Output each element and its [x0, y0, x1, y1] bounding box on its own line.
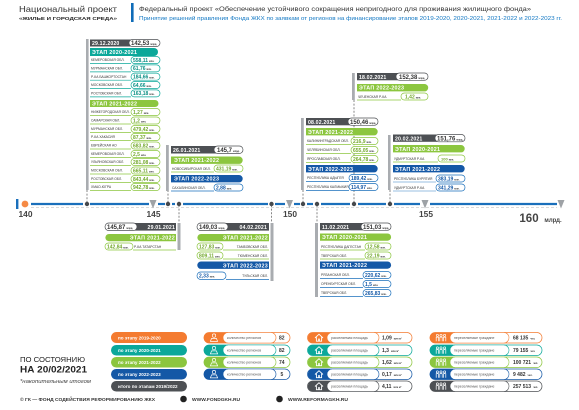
panel: 11.02.2021: ЭТАП 2021-2022 [322, 263, 367, 269]
stats: resettled citizens: переселяемые граждане [454, 372, 494, 376]
panel: 29.12.2020: 142,53 млрд. [131, 41, 157, 47]
stats: resettled area: расселяемая площадь [331, 384, 368, 388]
panel: 29.12.2020: Р-КА ХАКАСИЯ [91, 135, 116, 139]
panel: 04.02.2021: 809,11 млн. [199, 253, 221, 259]
panel: 04.02.2021: ТАМБОВСКАЯ ОБЛ. [237, 245, 268, 249]
stats: resettled area [308, 332, 412, 392]
panel: 11.02.2021: 22,19 млн. [367, 253, 386, 259]
panel: 29.12.2020: 163,18 млн. [133, 91, 155, 97]
panel: 08.02.2021: 655,05 млн. [353, 148, 375, 154]
panel: 20.02.2021: ЭТАП 2020-2021 [395, 147, 440, 153]
stats: number of regions: 82 [279, 336, 285, 342]
legend: stages [111, 332, 187, 392]
legend: stages: по этапу 2021-2022 [118, 360, 161, 365]
panel: 18.02.2021 [352, 73, 428, 100]
stats: resettled citizens: 68 135 чел. [513, 336, 536, 342]
panel: 29.12.2020: 61,76 млн. [133, 66, 152, 72]
footer: © ГК — ФОНД СОДЕЙСТВИЯ РЕФОРМИРОВАНИЮ ЖКХ [20, 397, 155, 402]
panel: 29.12.2020: 683,82 млн. [133, 143, 155, 149]
panel: 11.02.2021: 151,03 млрд. [363, 225, 389, 231]
panel: 29.12.2020: ЭТАП 2020-2021 [92, 50, 137, 56]
panel: 29.12.2020: 64,66 млн. [133, 83, 152, 89]
panel: 11.02.2021: 220,62 млн. [365, 273, 387, 279]
stats: resettled citizens: переселяемые граждане [454, 384, 494, 388]
panel: 29.12.2020: 281,08 млн. [133, 160, 155, 166]
stats: number of regions: 82 [279, 348, 285, 354]
panel: 29.12.2020: МОСКОВСКАЯ ОБЛ. [91, 169, 123, 173]
timeline axis: 160 [519, 213, 539, 225]
legend: stages: итого по этапам 2019/2022 [118, 384, 178, 389]
panel: 29.12.2020: 87,37 млн. [133, 135, 152, 141]
panel: 11.02.2021: РЯЗАНСКАЯ ОБЛ. [321, 273, 350, 277]
header: federal project [139, 5, 562, 22]
timeline axis: 155 [419, 209, 433, 219]
panel: 08.02.2021: ЧЕЛЯБИНСКАЯ ОБЛ. [307, 148, 341, 152]
legend: stages: по этапу 2019-2020 [118, 335, 161, 340]
footer [20, 396, 348, 402]
panel: 18.02.2021: 152,38 млрд. [399, 75, 425, 81]
stats: resettled area: 1,62 млн м² [382, 360, 402, 366]
panel: 08.02.2021: 08.02.2021 [308, 120, 335, 126]
legend: stages: по этапу 2022-2023 [118, 372, 161, 377]
panel: 29.12.2020: МОСКОВСКАЯ ОБЛ. [91, 83, 123, 87]
stats: resettled area: расселяемая площадь [331, 336, 368, 340]
panel: 29.12.2020 [86, 39, 160, 191]
stats: resettled area: расселяемая площадь [331, 372, 368, 376]
panel: 04.02.2021: ТЮМЕНСКАЯ ОБЛ. [238, 254, 268, 258]
panel: 20.02.2021 [388, 134, 465, 191]
panel: 20.02.2021: 20.02.2021 [395, 136, 422, 142]
timeline axis: 150 [283, 209, 297, 219]
panel: 08.02.2021: РЕСПУБЛИКА АДЫГЕЯ [307, 176, 344, 180]
stats: number of regions: количество регионов [227, 336, 261, 340]
panel: 29.12.2020: 184,66 млн. [133, 74, 155, 80]
panel: 26.01.2021: 431,19 млн. [216, 166, 238, 172]
stats: resettled citizens: переселяемые граждане [454, 336, 494, 340]
panel: 29.12.2020: ХМАО-ЮГРА [91, 185, 112, 189]
stats: resettled citizens [430, 332, 542, 392]
stats: resettled citizens: переселяемые граждане [454, 348, 494, 352]
panel: 29.12.2020: ЕВРЕЙСКАЯ АО [91, 144, 117, 148]
panel: 29.12.2020: УЛЬЯНОВСКАЯ ОБЛ. [91, 160, 124, 164]
panel: 04.02.2021: 2,33 млн. [199, 274, 215, 280]
panel: 20.02.2021: 341,29 млн. [438, 185, 460, 191]
stats: resettled citizens: 9 482 чел. [513, 372, 533, 378]
panel: 08.02.2021: 264,78 млн. [353, 157, 375, 163]
panel: 08.02.2021: 189,42 млн. [351, 176, 373, 182]
panel: 29.12.2020: САМАРСКАЯ ОБЛ. [91, 119, 120, 123]
panel: 26.01.2021: ЭТАП 2021-2022 [174, 158, 219, 164]
panel: 08.02.2021: ЯРОСЛАВСКАЯ ОБЛ. [307, 157, 340, 161]
panel: 04.02.2021: ЭТАП 2021-2022 [223, 236, 268, 242]
panel: 29.01.2021: ЭТАП 2021-2022 [130, 236, 175, 242]
panel: 18.02.2021: 1,42 млн. [405, 94, 421, 100]
stats: resettled citizens: 79 155 чел. [513, 348, 536, 354]
panel: 11.02.2021: ТВЕРСКАЯ ОБЛ. [321, 254, 347, 258]
panel: 29.12.2020: НИЖЕГОРОДСКАЯ ОБЛ. [91, 110, 130, 114]
panel: 11.02.2021: ТВЕРСКАЯ ОБЛ. [321, 291, 347, 295]
panel: 04.02.2021: 04.02.2021 [240, 225, 267, 231]
panel: 11.02.2021 [315, 223, 391, 297]
panel: 29.01.2021 [105, 223, 180, 250]
stats: resettled citizens: переселяемые граждане [454, 360, 494, 364]
panel: 20.02.2021: РЕСПУБЛИКА БУРЯТИЯ [394, 177, 433, 181]
panel: 26.01.2021: 2,88 млн. [216, 185, 232, 191]
panel: 29.12.2020: ЭТАП 2021-2022 [92, 102, 137, 108]
stats: resettled area: расселяемая площадь [331, 348, 368, 352]
panel: 26.01.2021: ЭТАП 2022-2023 [174, 177, 219, 183]
panel: 18.02.2021: ЧЕЧЕНСКАЯ Р-КА [358, 95, 387, 99]
panel: 29.12.2020: 558,11 млн. [133, 58, 155, 64]
panel: 11.02.2021: ОРЕНБУРГСКАЯ ОБЛ. [321, 282, 356, 286]
panel: 29.12.2020: 29.12.2020 [92, 41, 119, 47]
panel: 20.02.2021: ЭТАП 2021-2022 [395, 167, 440, 173]
status date heading: *накопительным итогом [20, 379, 92, 385]
stats: resettled area: 0,17 млн м² [382, 372, 402, 378]
stats: number of regions: 74 [279, 360, 285, 366]
panel: 04.02.2021: 149,03 млрд. [199, 225, 225, 231]
panel: 20.02.2021: УДМУРТСКАЯ Р-КА [394, 157, 425, 161]
stats: resettled citizens: 100 721 чел. [513, 360, 538, 366]
panel: 11.02.2021: ЭТАП 2020-2021 [322, 235, 367, 241]
panel: 26.01.2021: 145,7 млрд. [217, 148, 240, 154]
stats: resettled area: 4,11 млн м² [382, 384, 402, 390]
header: federal project: Принятие решений правления Фонда ЖКХ по заявкам от регионов на финансирование этапов 2019-2020, 2020-2021, 2021-2022 и 2022-2023 гг. [139, 15, 562, 22]
connector dashes [87, 100, 390, 223]
header accent bar [131, 3, 134, 22]
header: national project: «ЖИЛЬЕ И ГОРОДСКАЯ СРЕДА» [19, 16, 117, 21]
stats: number of regions: 5 [280, 372, 284, 378]
panel: 18.02.2021: ЭТАП 2022-2023 [359, 86, 404, 92]
panel: 29.12.2020: РОСТОВСКАЯ ОБЛ. [91, 92, 122, 96]
panel: 29.12.2020: Р-КА БАШКОРТОСТАН [91, 75, 127, 79]
legend: stages: по этапу 2020-2021 [118, 348, 161, 353]
panel: 08.02.2021: 150,46 млрд. [350, 120, 376, 126]
panel: 29.12.2020: МУРМАНСКАЯ ОБЛ. [91, 67, 123, 71]
panel: 26.01.2021: САХАЛИНСКАЯ ОБЛ. [172, 186, 206, 190]
panel: 26.01.2021: 26.01.2021 [173, 148, 200, 154]
panel: 08.02.2021: ЭТАП 2021-2022 [308, 130, 353, 136]
panel: 20.02.2021: 383,19 млн. [438, 176, 460, 182]
panel: 11.02.2021: 11.02.2021 [322, 225, 349, 231]
stats: resettled area: расселяемая площадь [331, 360, 368, 364]
panel: 20.02.2021: 151,76 млрд. [437, 136, 463, 142]
panel: 29.01.2021: Р-КА ТАТАРСТАН [134, 245, 162, 249]
stats: resettled citizens: 257 513 чел. [513, 384, 538, 390]
panel: 26.01.2021 [166, 145, 243, 191]
panel: 08.02.2021 [301, 118, 378, 191]
panel: 18.02.2021: 18.02.2021 [359, 75, 386, 81]
panel: 29.12.2020: МУРМАНСКАЯ ОБЛ. [91, 127, 123, 131]
stats: number of regions: количество регионов [227, 348, 261, 352]
header: federal project: Федеральный проект «Обеспечение устойчивого сокращения непригодного для проживания жилищного фонда» [139, 5, 531, 13]
panel: 04.02.2021 [197, 223, 274, 281]
panel: 08.02.2021: ЭТАП 2022-2023 [308, 167, 353, 173]
panel: 29.12.2020: 479,42 млн. [133, 127, 155, 133]
panel: 29.12.2020: 665,11 млн. [133, 168, 155, 174]
panel: 04.02.2021: ТУЛЬСКАЯ ОБЛ. [242, 274, 268, 278]
panel: 29.12.2020: 942,78 млн. [133, 185, 155, 191]
panel: 29.12.2020: РОСТОВСКАЯ ОБЛ. [91, 177, 122, 181]
panel: 26.01.2021: НОВОСИБИРСКАЯ ОБЛ. [172, 167, 211, 171]
status date heading: ПО СОСТОЯНИЮ [20, 355, 85, 364]
timeline axis: 145 [147, 209, 161, 219]
panel: 08.02.2021: 216,9 млн. [353, 139, 372, 145]
panel: 29.12.2020: 1,27 млн. [133, 110, 149, 116]
panel: 11.02.2021: 265,83 млн. [365, 291, 387, 297]
panel: 11.02.2021: 12,58 млн. [367, 244, 386, 250]
stats: number of regions [204, 332, 290, 380]
panel: 11.02.2021: 1,5 млн. [365, 282, 378, 288]
panel: 08.02.2021: РЕСПУБЛИКА КАЛМЫКИЯ [307, 185, 349, 189]
header: national project [19, 4, 117, 21]
panel: 29.12.2020: 2,5 млн. [133, 152, 146, 158]
panel: 04.02.2021: ЭТАП 2022-2023 [223, 263, 268, 269]
panel: 29.01.2021: 29.01.2021 [148, 225, 175, 231]
start marker [22, 201, 28, 207]
panel: 11.02.2021: РЕСПУБЛИКА ДАГЕСТАН [321, 245, 362, 249]
panel: 29.12.2020: 1,2 млн. [133, 118, 146, 124]
timeline axis: млрд. [544, 218, 562, 224]
stats: number of regions: количество регионов [227, 372, 261, 376]
panel: 20.02.2021: 100 млн. [441, 156, 454, 161]
panel: 08.02.2021: КАЛИНИНГРАДСКАЯ ОБЛ. [307, 139, 349, 143]
stats: resettled area: 1,3 млн м² [382, 348, 399, 354]
panel: 29.12.2020: 843,44 млн. [133, 177, 155, 183]
panel: 20.02.2021: УДМУРТСКАЯ Р-КА [394, 186, 425, 190]
panel: 29.01.2021: 145,87 млрд. [107, 225, 133, 231]
panel: 29.01.2021: 142,84 млн. [107, 244, 129, 250]
footer: WWW.FONDGKH.RU [192, 397, 240, 402]
stats: number of regions: количество регионов [227, 360, 261, 364]
timeline axis [16, 199, 564, 225]
timeline axis: 140 [19, 209, 33, 219]
panel: 04.02.2021: 127,83 млн. [199, 244, 221, 250]
header: national project: Национальный проект [19, 4, 117, 14]
status date heading [20, 355, 92, 385]
panel: 29.12.2020: КЕМЕРОВСКАЯ ОБЛ. [91, 152, 125, 156]
footer: WWW.REFORMAGKH.RU [288, 397, 348, 402]
panel: 08.02.2021: 114,97 млн. [351, 185, 373, 191]
panel: 29.12.2020: КЕМЕРОВСКАЯ ОБЛ. [91, 58, 125, 62]
stats: resettled area: 1,09 млн м² [382, 336, 402, 342]
status date heading: НА 20/02/2021 [20, 364, 87, 374]
